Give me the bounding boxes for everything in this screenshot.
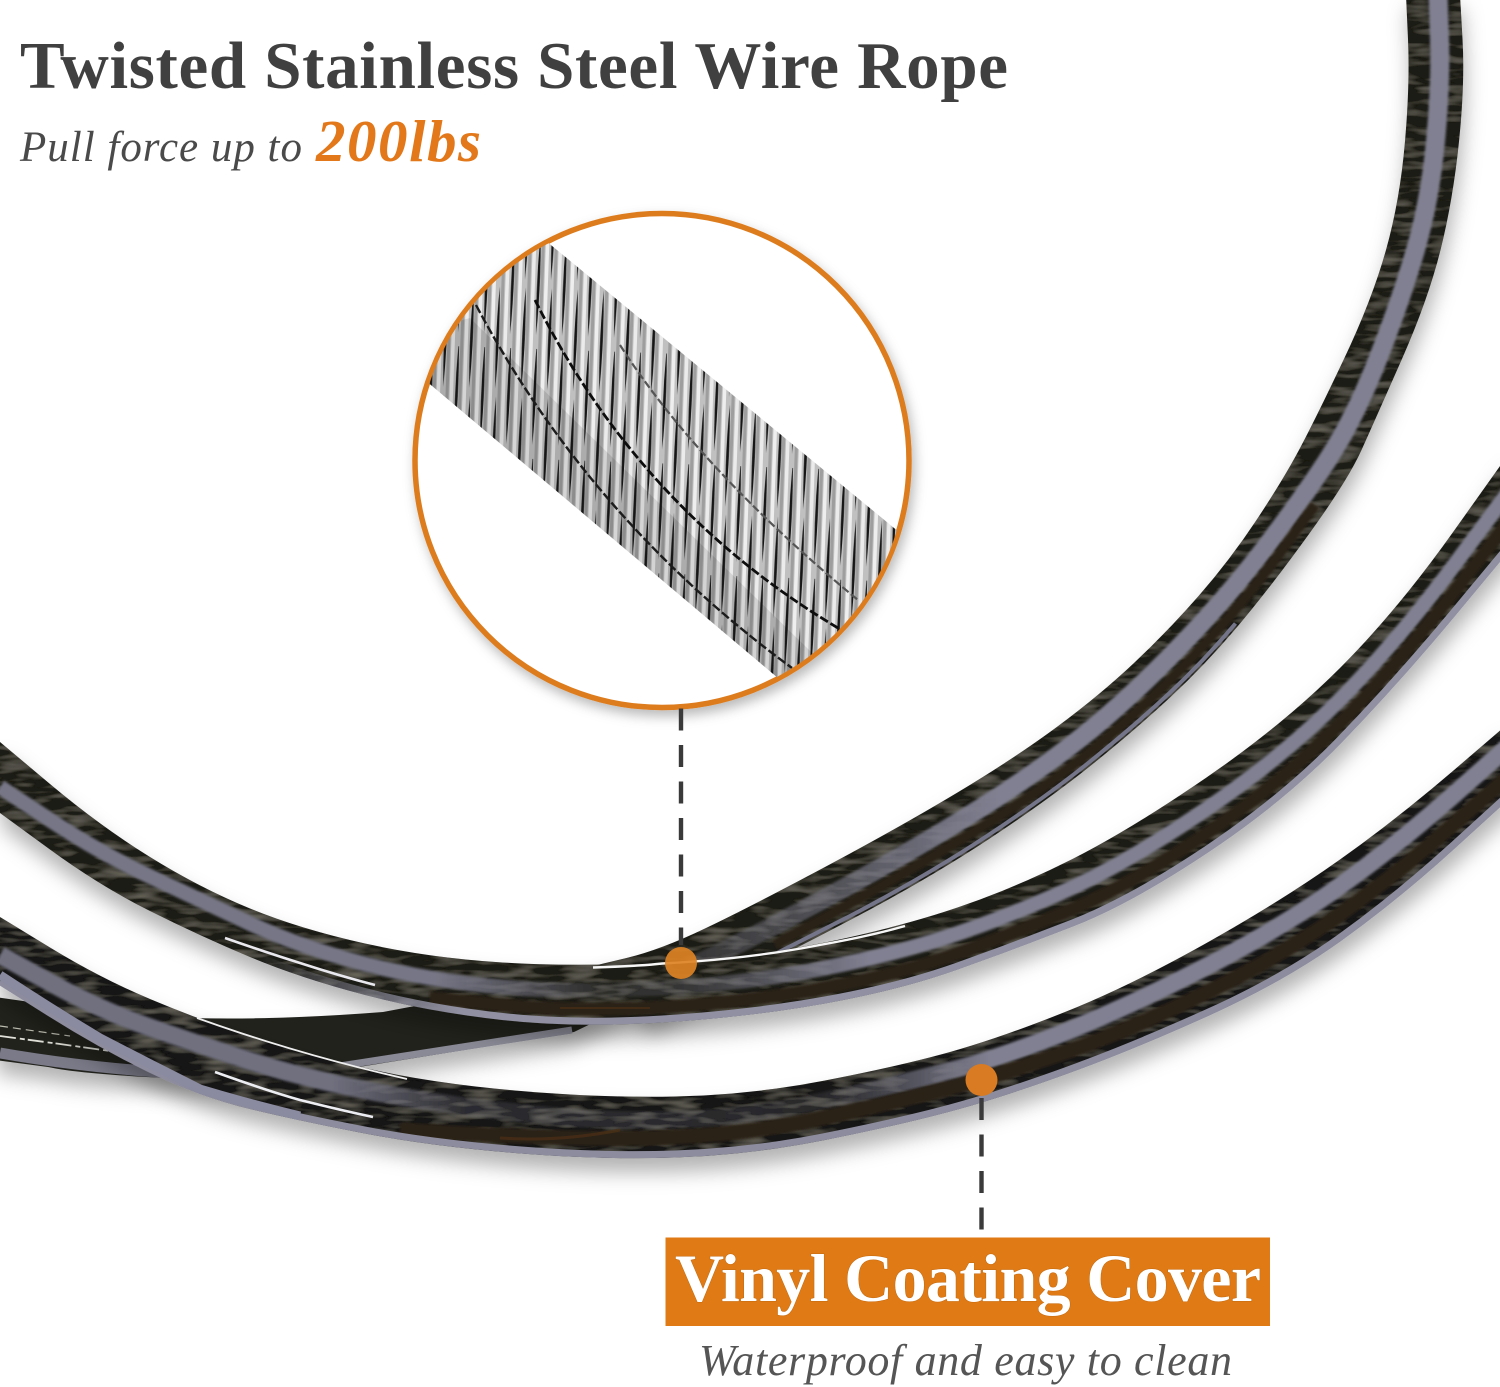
dot: lower rope marker <box>966 1064 998 1096</box>
cable: upper loop from top right <box>593 0 1463 1020</box>
magnifier circle: stainless steel rope close-up <box>408 210 922 723</box>
title: Twisted Stainless Steel Wire Rope <box>20 29 1008 103</box>
subtitle: Pull force up to <box>19 124 302 171</box>
dot: upper rope marker <box>665 947 697 979</box>
cable: middle loop <box>0 452 1500 1025</box>
dashed leader: circle to upper dot <box>679 708 683 945</box>
pull force value: 200lbs <box>315 108 481 174</box>
twisted wire strands <box>430 243 897 677</box>
cable: lower loop <box>0 722 1500 1158</box>
cable: lower left segment passing behind <box>0 990 640 1079</box>
label box: vinyl coating cover: Vinyl Coating Cover <box>675 1240 1261 1316</box>
dashed leader: lower dot to label <box>979 1098 984 1230</box>
caption: waterproof: Waterproof and easy to clean <box>699 1336 1232 1385</box>
